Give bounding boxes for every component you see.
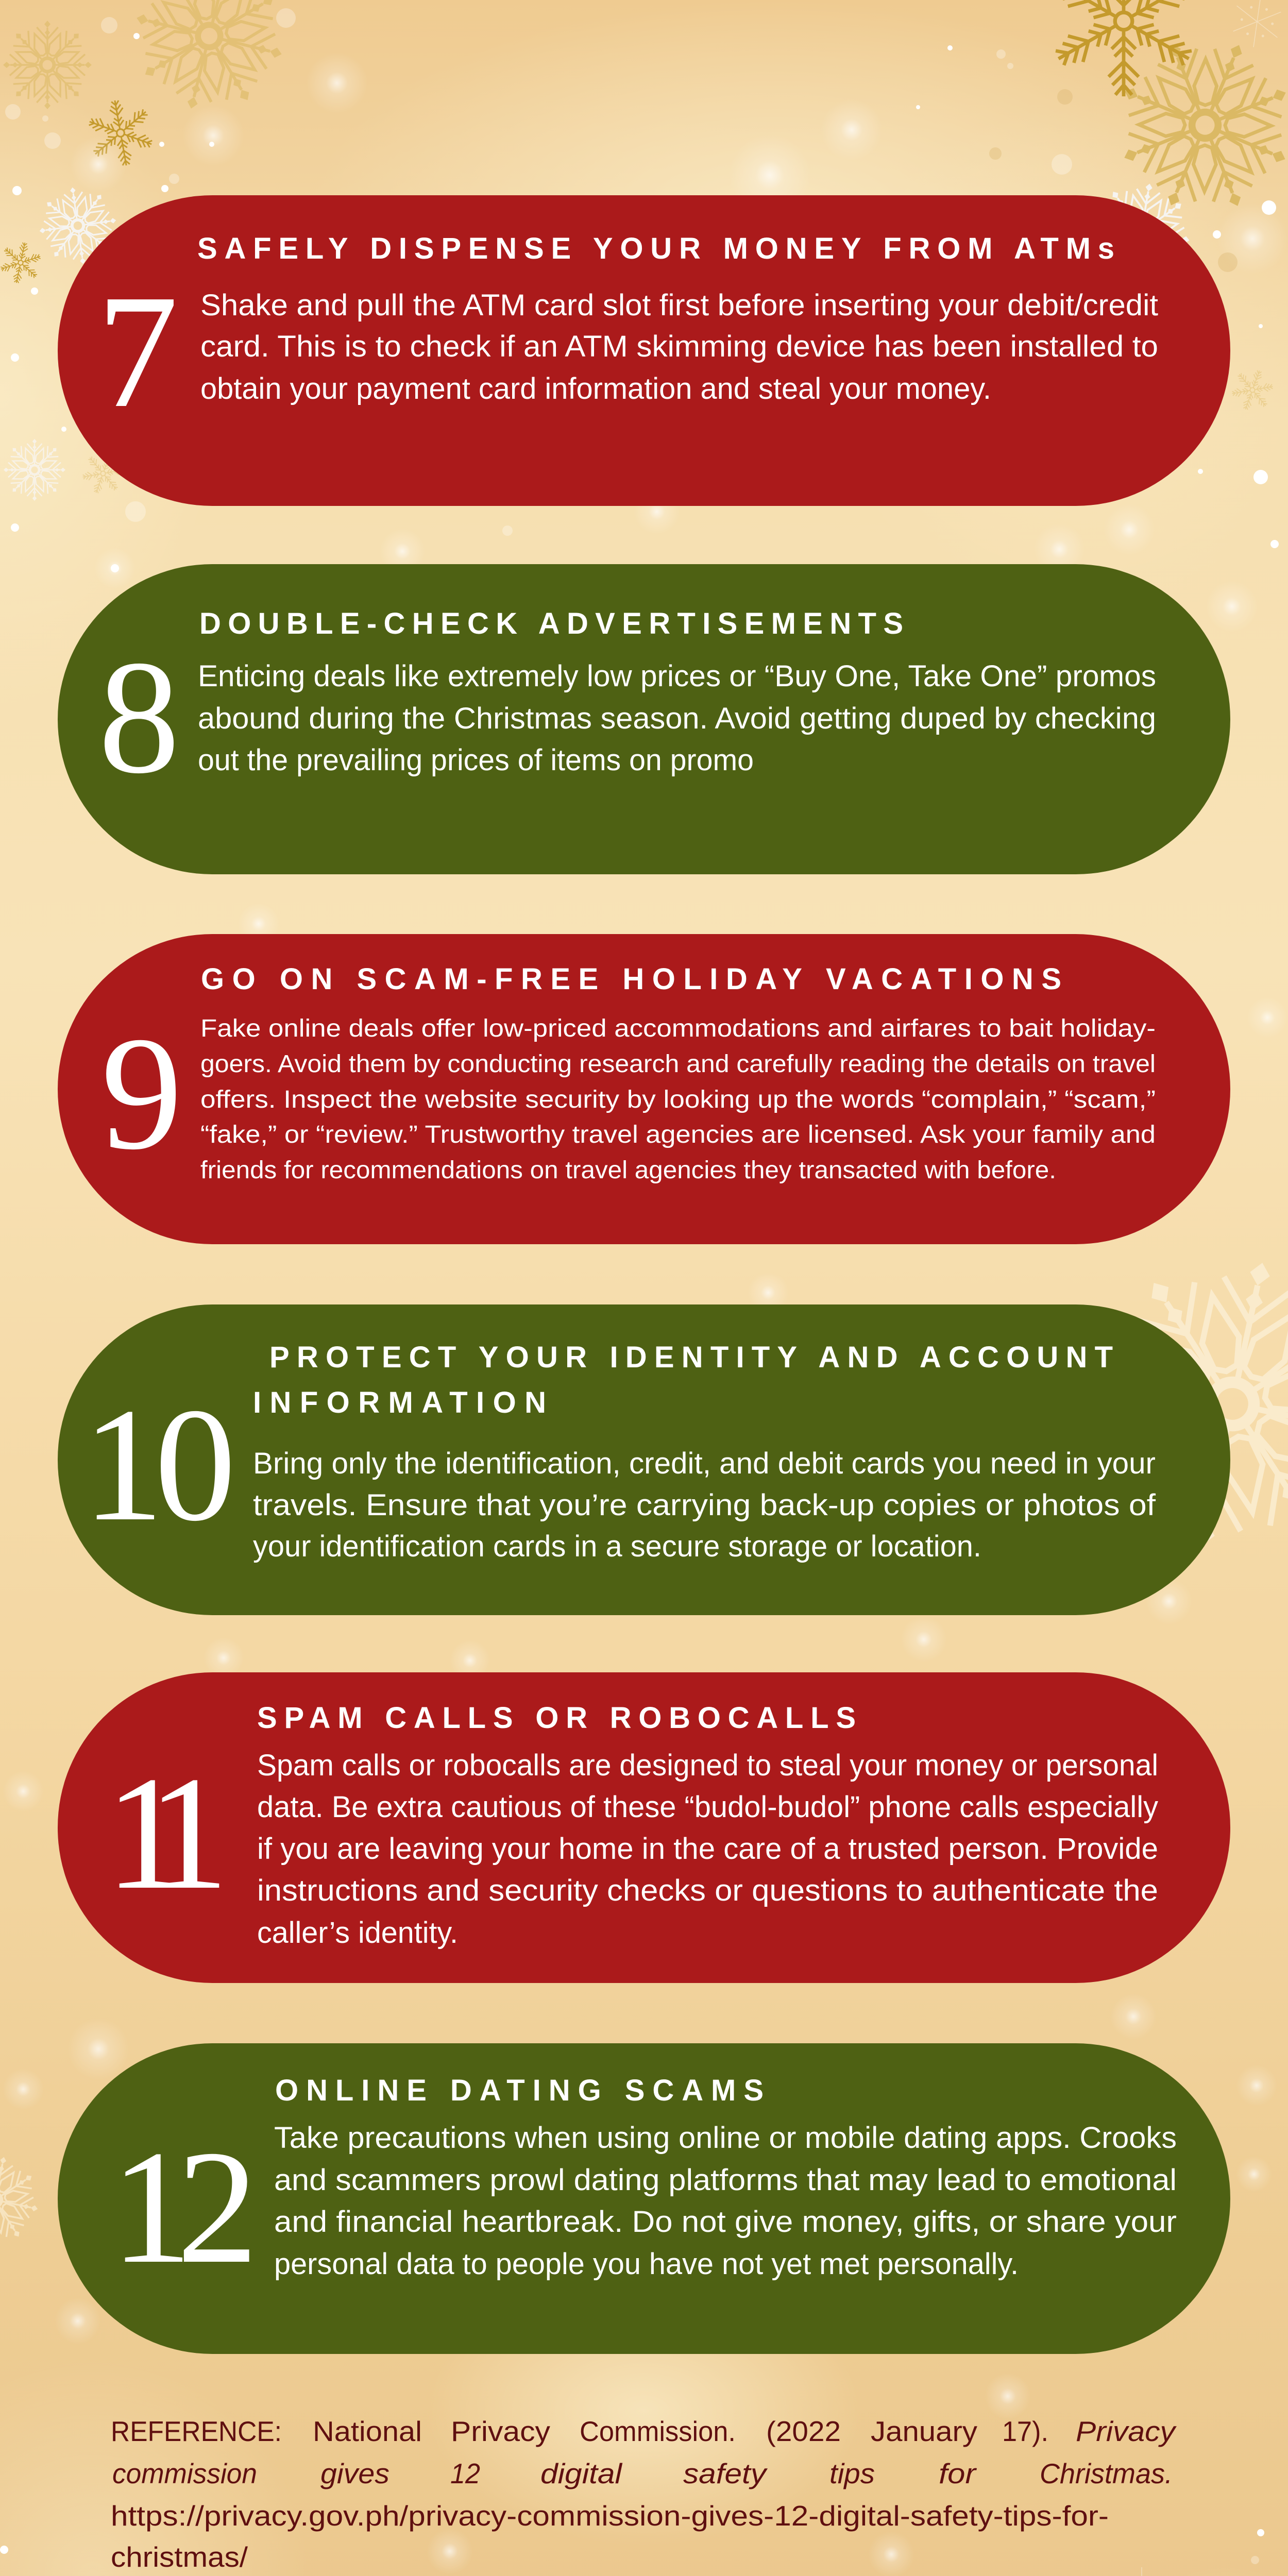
heading: tip 7: SAFELY DISPENSE YOUR MONEY FROM ATMs — [197, 232, 1114, 265]
body: tip 10: your identification cards in a secure storage or location. — [253, 1530, 981, 1563]
reference citation: 17). — [1002, 2415, 1048, 2447]
number 8: 8 — [98, 627, 180, 807]
body: tip 9 — [200, 1015, 1156, 1184]
reference citation: National — [313, 2415, 422, 2447]
body: tip 9: “fake,” or “review.” Trustworthy travel agencies are licensed. Ask your family and — [200, 1121, 1156, 1148]
reference citation: Privacy — [1076, 2415, 1177, 2447]
reference citation — [111, 2415, 1177, 2573]
background snowflakes: bottom — [0, 2567, 1288, 2576]
reference citation: REFERENCE: — [111, 2415, 282, 2447]
body: tip 10 — [253, 1447, 1156, 1563]
body: tip 12 — [274, 2121, 1177, 2281]
number 12: 12 — [111, 2117, 250, 2297]
reference citation: commission — [112, 2458, 257, 2489]
heading: tip 9: GO ON SCAM-FREE HOLIDAY VACATIONS — [201, 962, 1061, 996]
body: tip 12: personal data to people you have not yet met personally. — [274, 2247, 1019, 2281]
body: tip 11: data. Be extra cautious of these “budol-budol” phone calls especially — [257, 1790, 1158, 1824]
body: tip 7: Shake and pull the ATM card slot first before inserting your debit/credit — [200, 289, 1158, 322]
background snowflakes: middle — [0, 1233, 1288, 2252]
heading: tip 10: PROTECT YOUR IDENTITY AND ACCOUNT — [269, 1341, 1113, 1374]
panel: tip 11 — [58, 1672, 1230, 1983]
body: tip 9: Fake online deals offer low-priced accommodations and airfares to bait holiday- — [200, 1015, 1156, 1042]
reference citation: Commission. — [580, 2415, 736, 2447]
body: tip 11: if you are leaving your home in the care of a trusted person. Provide — [257, 1832, 1158, 1866]
body: tip 9: goers. Avoid them by conducting research and carefully reading the details on travel — [200, 1050, 1156, 1078]
body: tip 8: abound during the Christmas season. Avoid getting duped by checking — [198, 702, 1156, 735]
heading: tip 10: INFORMATION — [253, 1386, 546, 1419]
reference citation: https://privacy.gov.ph/privacy-commission-gives-12-digital-safety-tips-for- — [111, 2500, 1109, 2532]
panel: tip 10 — [58, 1304, 1230, 1615]
number 10: 10 — [82, 1375, 231, 1555]
body: tip 12: and financial heartbreak. Do not give money, gifts, or share your — [274, 2205, 1177, 2239]
body: tip 10: Bring only the identification, credit, and debit cards you need in your — [253, 1447, 1156, 1480]
body: tip 12: Take precautions when using online or mobile dating apps. Crooks — [274, 2121, 1177, 2155]
body: tip 11: instructions and security checks or questions to authenticate the — [257, 1874, 1158, 1907]
reference citation: digital — [540, 2458, 623, 2489]
heading: tip 8: DOUBLE-CHECK ADVERTISEMENTS — [199, 607, 903, 640]
heading: tip 10 — [253, 1341, 1113, 1419]
body: tip 7: obtain your payment card information and steal your money. — [200, 372, 991, 405]
body: tip 9: friends for recommendations on travel agencies they transacted with before. — [200, 1157, 1056, 1184]
reference citation: safety — [683, 2458, 768, 2489]
body: tip 8 — [198, 659, 1156, 777]
reference citation: (2022 — [766, 2415, 841, 2447]
body: tip 9: offers. Inspect the website security by looking up the words “complain,” “scam,” — [200, 1086, 1156, 1113]
panel: tip 7 — [58, 195, 1230, 506]
reference citation: tips — [829, 2458, 875, 2489]
body: tip 12: and scammers prowl dating platforms that may lead to emotional — [274, 2163, 1177, 2197]
number 7: 7 — [97, 261, 178, 442]
body: tip 11: Spam calls or robocalls are designed to steal your money or personal — [257, 1749, 1158, 1782]
reference citation: 12 — [450, 2458, 480, 2489]
number 11: 11 — [105, 1743, 221, 1923]
reference citation: for — [939, 2458, 977, 2489]
number 9: 9 — [101, 1003, 182, 1183]
reference citation: christmas/ — [111, 2541, 248, 2573]
reference citation: gives — [320, 2458, 389, 2489]
heading: tip 11: SPAM CALLS OR ROBOCALLS — [257, 1701, 856, 1735]
reference citation: January — [871, 2415, 978, 2447]
panel: tip 12 — [58, 2043, 1230, 2354]
panel: tip 8 — [58, 564, 1230, 874]
reference citation: Christmas. — [1040, 2458, 1173, 2489]
body: tip 11 — [257, 1749, 1158, 1950]
panel: tip 9 — [58, 934, 1230, 1244]
body: tip 8: out the prevailing prices of items on promo — [198, 743, 754, 777]
body: tip 7: card. This is to check if an ATM skimming device has been installed to — [200, 330, 1158, 363]
body: tip 10: travels. Ensure that you’re carrying back-up copies or photos of — [253, 1488, 1156, 1522]
body: tip 11: caller’s identity. — [257, 1916, 458, 1950]
heading: tip 12: ONLINE DATING SCAMS — [275, 2074, 764, 2107]
reference citation: Privacy — [451, 2415, 551, 2447]
body: tip 8: Enticing deals like extremely low prices or “Buy One, Take One” promos — [198, 659, 1156, 693]
body: tip 7 — [200, 289, 1158, 405]
background snowflakes: top — [0, 0, 1288, 501]
